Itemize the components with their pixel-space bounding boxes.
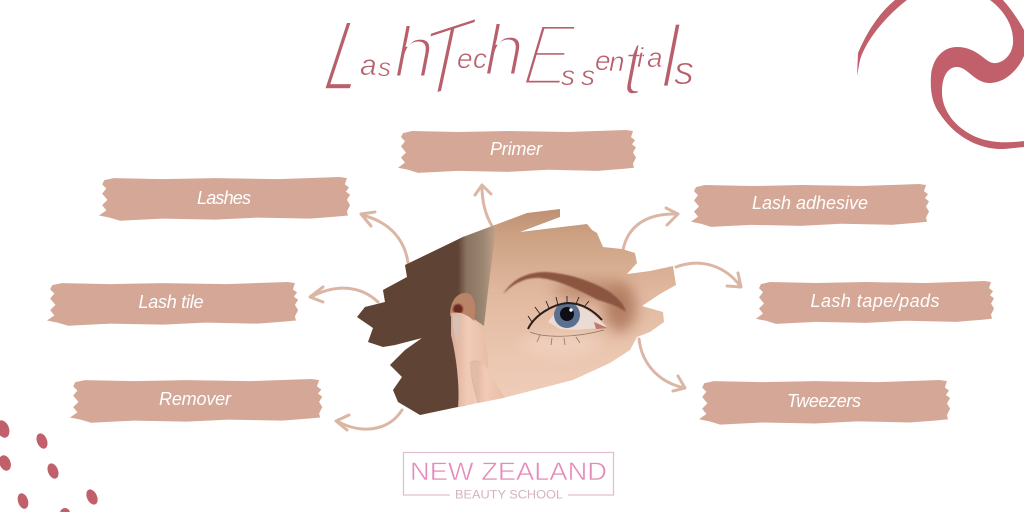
hair <box>458 224 496 326</box>
title: c <box>473 43 487 74</box>
icon: fingers <box>451 312 488 408</box>
logo <box>404 452 614 502</box>
title: t <box>622 23 647 111</box>
icon: eyebrow <box>503 272 626 312</box>
title <box>317 0 694 122</box>
logo tagline: BEAUTY SCHOOL <box>455 488 563 502</box>
title: h <box>394 13 434 93</box>
title: T <box>416 0 479 122</box>
panel: Primer: Primer <box>490 139 543 159</box>
title: e <box>457 43 473 74</box>
panel: Lash tape/pads <box>756 281 994 324</box>
panel: Tweezers <box>699 380 950 425</box>
panel: Lash adhesive <box>691 184 929 227</box>
panel: Lash tape/pads: Lash tape/pads <box>810 291 940 311</box>
panel: Remover: Remover <box>159 389 232 409</box>
title: s <box>378 52 391 82</box>
title: n <box>609 46 625 77</box>
title: a <box>647 42 663 73</box>
swirl decoration <box>857 0 1024 149</box>
title: e <box>595 45 611 76</box>
title: l <box>660 8 683 108</box>
panel: Lash tile <box>47 282 298 326</box>
title: s <box>581 60 595 91</box>
icon: eye <box>528 296 608 345</box>
title: L <box>317 0 375 111</box>
arrows <box>310 185 741 430</box>
panel: Lash tile: Lash tile <box>138 292 204 312</box>
decorative dots <box>0 418 100 512</box>
logo name: NEW ZEALAND <box>410 458 607 486</box>
title: s <box>561 60 575 91</box>
panel: Remover <box>70 379 322 423</box>
panel: Lash adhesive: Lash adhesive <box>752 193 868 213</box>
title: h <box>484 11 524 91</box>
panel: Primer <box>398 130 636 173</box>
title: a <box>360 49 377 82</box>
eye socket shading <box>604 284 636 332</box>
panel: Tweezers: Tweezers <box>787 391 861 411</box>
title: E <box>518 5 581 104</box>
central eye photo in brush stroke <box>357 209 676 415</box>
title: i <box>637 42 644 73</box>
icon: ear <box>450 293 475 322</box>
panel: Lashes <box>99 177 350 221</box>
panel: Lashes: Lashes <box>197 188 251 208</box>
title: s <box>674 49 694 93</box>
